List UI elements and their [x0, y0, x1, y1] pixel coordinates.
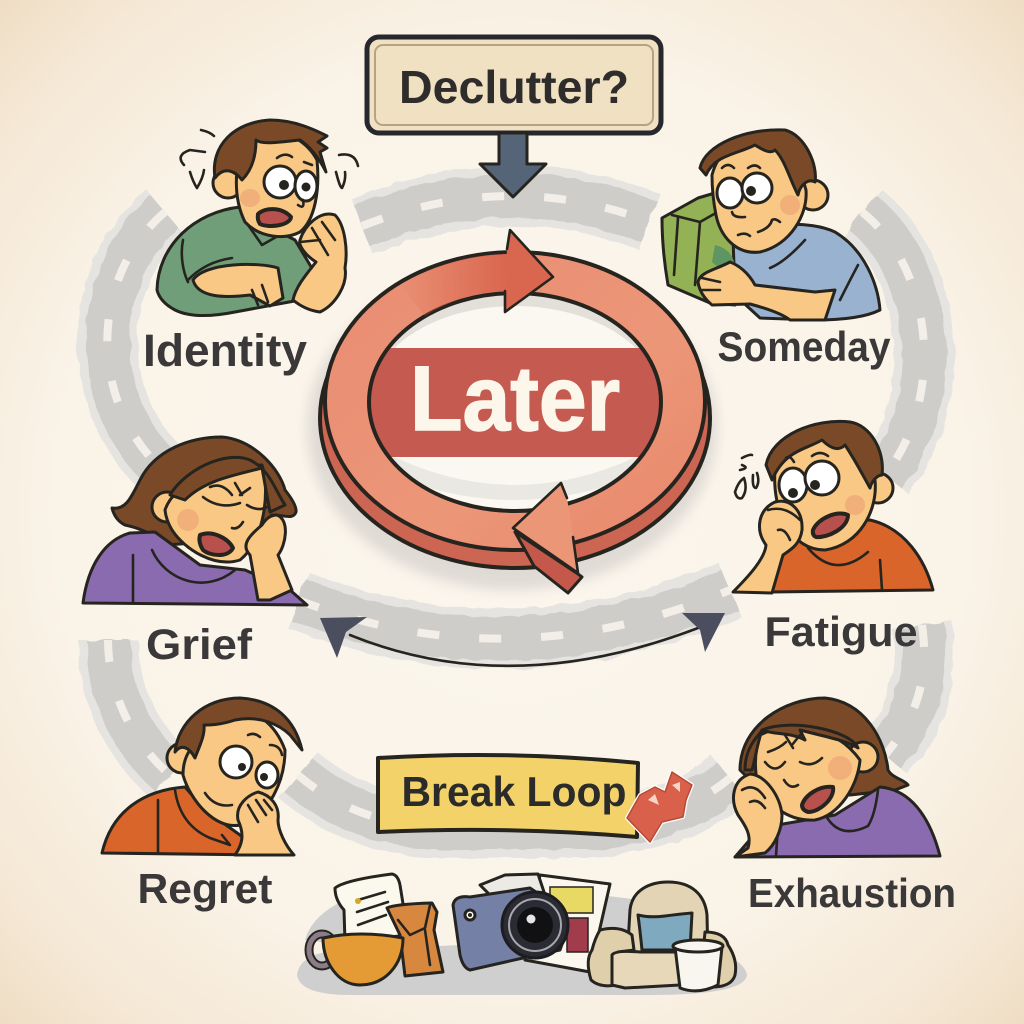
arrows: two-way loop on middle road	[320, 613, 725, 666]
item shadow	[297, 895, 747, 995]
road: middle arc	[298, 590, 730, 639]
road: upper right arc	[862, 212, 924, 475]
sign: Declutter?: Declutter?	[399, 61, 629, 113]
keepsake items	[297, 874, 747, 995]
paper bag	[387, 903, 443, 976]
button: Break Loop	[378, 755, 638, 837]
character: Identity	[157, 120, 358, 316]
cup	[673, 940, 723, 991]
ring hole	[369, 293, 661, 511]
label: Grief: Grief	[146, 621, 253, 669]
label: Fatigue: Fatigue	[764, 608, 918, 655]
word: Later: Later	[410, 348, 620, 450]
character: Exhaustion	[734, 698, 940, 857]
character: Regret	[102, 698, 302, 855]
ring top layer	[325, 252, 705, 550]
paper	[335, 874, 408, 942]
photo album	[525, 875, 610, 972]
road: lower left arc	[108, 640, 170, 775]
label: Identity: Identity	[143, 325, 307, 376]
character: Someday	[662, 130, 880, 320]
character: Grief	[83, 437, 307, 605]
road: top arc	[362, 196, 650, 226]
label: Regret: Regret	[138, 865, 273, 912]
top arrow	[400, 230, 553, 316]
mug	[309, 934, 403, 985]
ring base layer	[320, 268, 710, 568]
ring shadow	[307, 266, 717, 590]
character: Fatigue	[733, 421, 933, 593]
label: Someday: Someday	[718, 323, 891, 370]
road: lower right arc	[885, 625, 924, 755]
sign: Declutter?	[367, 37, 661, 133]
label: Exhaustion: Exhaustion	[748, 870, 956, 916]
icon: broken link	[627, 772, 692, 842]
central loop	[307, 230, 717, 593]
camera	[453, 874, 568, 970]
banner: Later	[360, 293, 670, 500]
bottom arrow	[513, 483, 582, 593]
armchair	[588, 882, 736, 988]
button: Break Loop: Break Loop	[402, 768, 626, 815]
arrow: sign to loop	[480, 133, 546, 197]
road: bottom arc	[298, 775, 730, 828]
road: upper left arc	[107, 212, 185, 488]
ring hole outline	[369, 293, 661, 511]
